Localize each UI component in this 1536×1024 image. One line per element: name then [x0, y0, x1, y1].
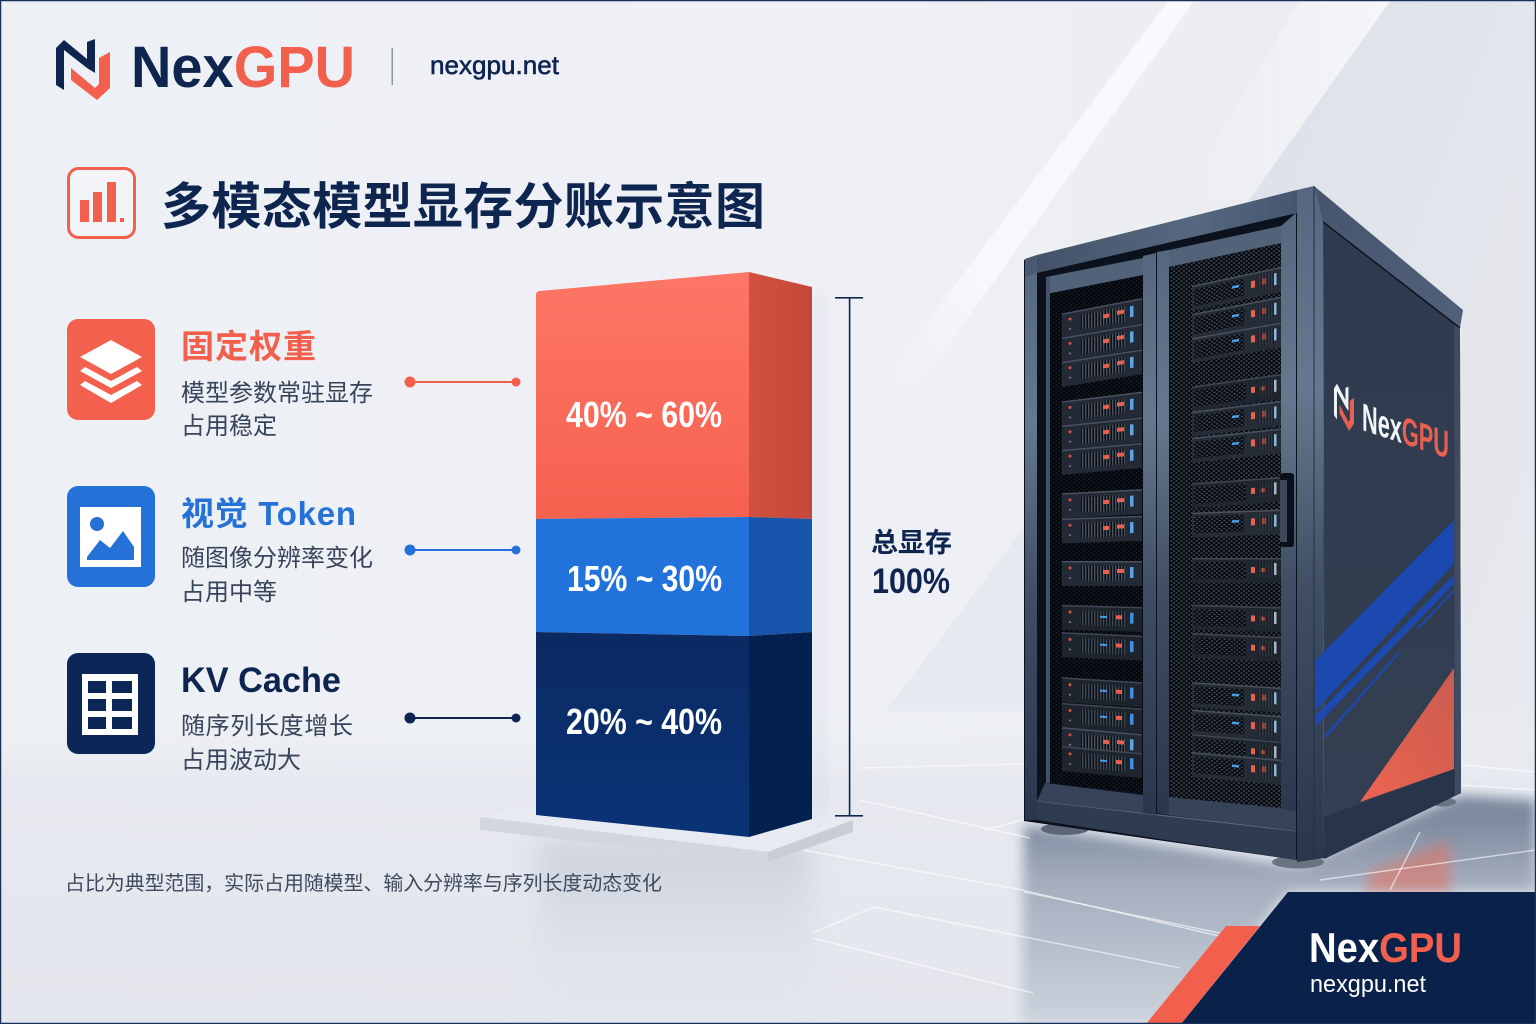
rack front frame	[1024, 186, 1324, 862]
segment: vision token 15-30%: 15% ~ 30%	[567, 558, 722, 599]
total label	[871, 528, 952, 601]
side logo: NexGPU	[1362, 396, 1449, 467]
connector: vision token	[404, 544, 520, 556]
rack feet	[1041, 798, 1456, 868]
heading: KV cache: KV Cache	[181, 661, 341, 700]
brand wordmark: NexGPU	[131, 35, 355, 100]
total label: 100%	[872, 562, 950, 601]
description: fixed weights: 模型参数常驻显存	[181, 380, 373, 407]
description: vision token: 随图像分辨率变化	[181, 545, 373, 572]
server rack	[1024, 186, 1463, 868]
divider	[392, 48, 393, 85]
icon: table grid	[67, 653, 155, 754]
icon: layers	[67, 319, 155, 420]
description: fixed weights: 占用稳定	[181, 413, 277, 440]
connector: fixed weights	[404, 376, 520, 388]
left door server units	[1062, 298, 1142, 778]
segment: vision token 15-30%	[536, 517, 812, 636]
icon: N mark	[56, 39, 110, 100]
segment: fixed weights 40-60%	[536, 272, 812, 519]
connector: KV cache	[404, 712, 520, 724]
banner brand: NexGPU	[1309, 924, 1462, 971]
right door server units	[1192, 267, 1281, 785]
stacked bar chart	[536, 272, 826, 837]
item: KV cache	[67, 653, 520, 774]
heading: fixed weights: 固定权重	[181, 328, 316, 365]
icon: title bar chart	[68, 168, 134, 238]
rack top	[1314, 186, 1463, 328]
corner banner	[1146, 892, 1536, 1024]
total label: 总显存	[871, 528, 952, 558]
coral accent	[1146, 926, 1260, 1024]
segment: KV cache 20-40%: 20% ~ 40%	[566, 701, 722, 742]
segment: fixed weights 40-60%: 40% ~ 60%	[566, 394, 722, 435]
website url: nexgpu.net	[430, 50, 560, 80]
description: KV cache: 随序列长度增长	[181, 713, 353, 740]
icon: image	[67, 486, 155, 587]
base plate	[480, 806, 853, 862]
side stripes	[1315, 520, 1454, 739]
footnote: 占比为典型范围，实际占用随模型、输入分辨率与序列长度动态变化	[65, 872, 662, 895]
description: KV cache: 占用波动大	[181, 747, 301, 774]
rack side panel	[1323, 222, 1461, 859]
right door	[1157, 213, 1296, 831]
banner url: nexgpu.net	[1310, 971, 1426, 998]
item: vision token	[67, 486, 520, 606]
total bracket	[835, 297, 863, 817]
heading: vision token: 视觉 Token	[181, 495, 356, 532]
title: 多模态模型显存分账示意图	[161, 179, 765, 235]
segment: KV cache 20-40%	[536, 632, 812, 837]
item: fixed weights	[67, 319, 520, 440]
side logo	[1334, 382, 1449, 467]
side coral triangle	[1360, 668, 1454, 802]
left door	[1037, 253, 1156, 815]
door handle	[1280, 473, 1294, 547]
description: vision token: 占用中等	[181, 579, 277, 606]
logo: NexGPU header	[56, 35, 355, 100]
